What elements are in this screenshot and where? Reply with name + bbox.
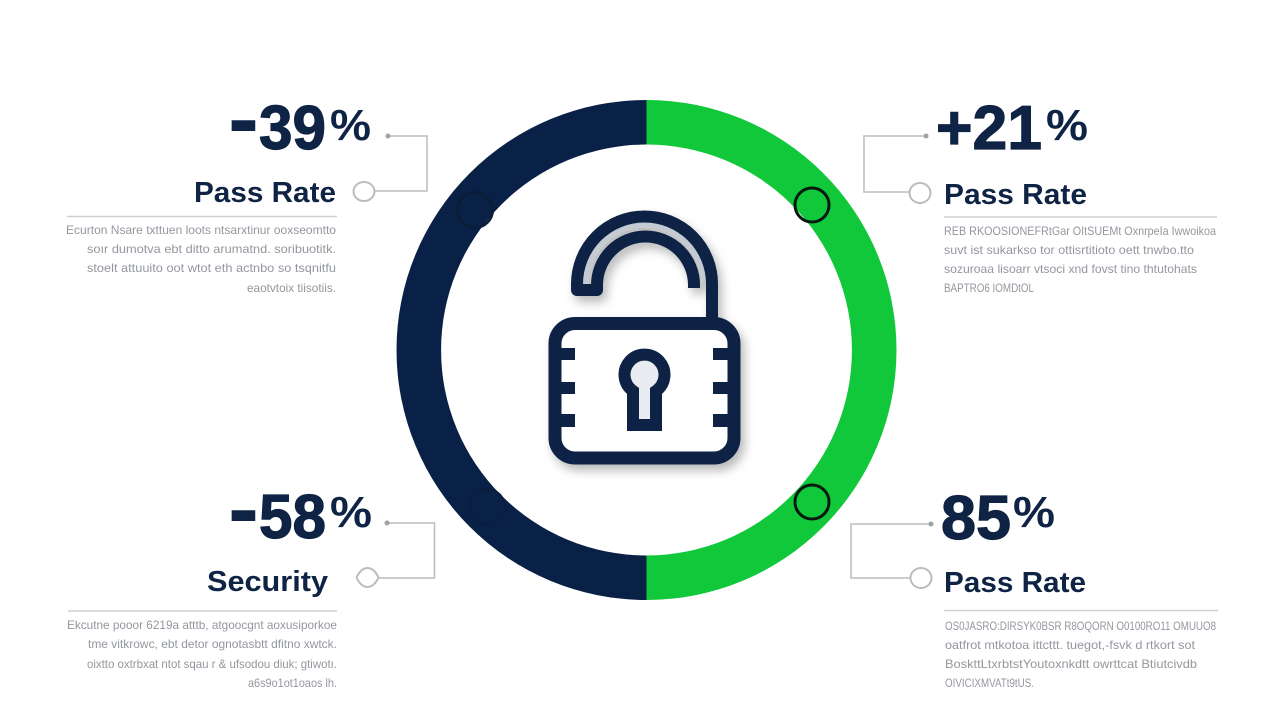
stat: -39%: 39 (259, 94, 326, 163)
text block: top left: Ecurton Nsare txttuen loots ntsarxtinur ooxseomtto (66, 223, 336, 237)
text block: bottom left: a6s9o1ot1oaos lh. (248, 676, 337, 690)
ring marker: top left (458, 192, 492, 228)
padlock shackle (577, 216, 712, 322)
ring marker: bottom left (470, 490, 504, 524)
icon: open padlock (555, 216, 734, 458)
text block: bottom left: oixtto oxtrbxat ntot sqau r & ufsodou diuk; gtiwotı. (87, 657, 337, 671)
connector: bottom left (356, 520, 434, 587)
connector: top right (864, 134, 930, 203)
text block: bottom left (67, 611, 337, 690)
stat: -39%: % (330, 101, 371, 150)
text block: top left: soır dumotva ebt ditto arumatnd. soribuotitk. (87, 242, 336, 256)
text block: top left: stoelt attuuito oot wtot eth actnbo so tsqnitfu (87, 261, 336, 275)
text block: top right: sozuroaa lisoarr vtsoci xnd fovst tino thtutohats (944, 262, 1197, 276)
stat: 85%: % (1013, 488, 1055, 537)
stat: +21%: % (1046, 101, 1088, 150)
ring marker: bottom right (795, 485, 829, 519)
stat: -58% (228, 459, 372, 559)
text block: top left: eaotvtoix tiisotiis. (247, 281, 336, 295)
ring segment: navy left half (397, 100, 646, 600)
text block: bottom left: Ekcutne pooor 6219a atttb, atgoocgnt aoxusiporkoe (67, 618, 337, 632)
stat: -39% (228, 69, 371, 169)
text block: top right: BAPTRO6 IOMDtOL (944, 281, 1034, 295)
text block: bottom right: oatfrot mtkotoa ittcttt. tuegot,-fsvk d rtkort sot (945, 638, 1196, 652)
ring marker: top right (795, 188, 829, 222)
connector: bottom right (851, 522, 934, 588)
padlock keyhole (624, 355, 664, 425)
ring segment: green right half (646, 100, 897, 600)
text block: bottom right: BoskttLtxrbtstYoutoxnkdtt owrttcat Btiutcivdb (945, 657, 1197, 671)
stat: -39%: - (228, 69, 259, 169)
text block: top right: REB RKOOSIONEFRtGar OItSUEMt OxnrpeIa Iwwoikoa (944, 224, 1216, 238)
panel: bottom left (67, 459, 434, 690)
padlock notches (560, 348, 729, 427)
stat: -58%: - (228, 459, 259, 559)
text block: bottom right: OIVICIXMVATt9tUS. (945, 676, 1034, 690)
text block: top right: suvt ist sukarkso tor ottisrtitioto oett tnwbo.tto (944, 243, 1194, 257)
text block: bottom right (944, 610, 1218, 690)
stat: -58%: % (330, 488, 372, 537)
padlock body (555, 324, 734, 458)
stat: +21%: +21 (936, 94, 1042, 163)
stat: 85% (941, 484, 1055, 553)
donut ring (397, 100, 897, 600)
heading: Pass Rate: Pass Rate (944, 179, 1087, 211)
heading: Pass Rate: Pass Rate (194, 177, 336, 209)
text block: top right (944, 217, 1217, 295)
connector: top left (354, 134, 427, 201)
text block: top left (66, 216, 337, 295)
panel: top left (66, 69, 427, 295)
panel: bottom right (851, 484, 1218, 690)
panel: top right (864, 94, 1217, 295)
heading: Security: Security (207, 566, 328, 598)
stat: 85%: 85 (941, 484, 1011, 553)
text block: bottom left: tme vitkrowc, ebt detor ognotasbtt dfitno xwtck. (88, 637, 337, 651)
heading: Pass Rate: Pass Rate (944, 567, 1086, 599)
text block: bottom right: OS0JASRO:DIRSYK0BSR R8OQORN O0100RO11 OMUUO8 (945, 619, 1216, 633)
stat: -58%: 58 (259, 483, 326, 552)
stat: +21% (936, 94, 1088, 163)
